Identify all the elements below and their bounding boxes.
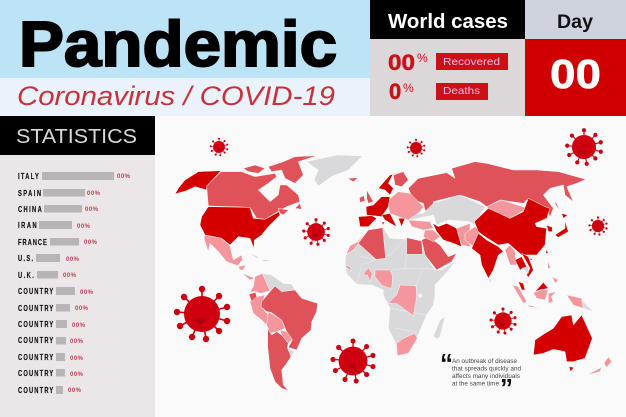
bar chart: 00%	[70, 372, 84, 378]
bar chart: 00%	[72, 323, 86, 329]
heading: day: Day	[557, 12, 593, 33]
recovered tag	[436, 53, 508, 70]
bar chart: COUNTRY	[18, 370, 54, 378]
bar chart: U.K.	[18, 272, 34, 280]
icon: virus atlantic south	[331, 339, 375, 383]
quote text block: An outbreak of disease	[452, 358, 517, 365]
bar chart: IRAN	[18, 222, 37, 230]
icon: virus top left	[210, 138, 228, 156]
recovered percent sign: %	[417, 51, 428, 65]
icon: virus pacific large	[175, 287, 229, 341]
bar chart: 00%	[117, 174, 131, 180]
icon: virus top centre	[407, 139, 425, 157]
heading: statistics: STATISTICS	[16, 126, 137, 148]
icon: virus atlantic north	[303, 219, 329, 245]
deaths percent sign: %	[403, 81, 414, 95]
bar chart: FRANCE	[18, 239, 47, 247]
bar chart: COUNTRY	[18, 321, 54, 329]
heading: world cases: World cases	[388, 11, 508, 33]
bar chart	[18, 172, 131, 395]
title: Pandemic	[19, 8, 337, 80]
bar chart: 00%	[84, 240, 98, 246]
bar chart: COUNTRY	[18, 305, 54, 313]
deaths value: 0	[389, 79, 401, 104]
bar chart: 00%	[68, 388, 82, 394]
russia and central asia	[408, 162, 586, 225]
quote text block: that spreads quickly and	[452, 366, 521, 372]
bar chart: 00%	[70, 356, 84, 362]
quote text block	[440, 348, 521, 403]
bar chart: COUNTRY	[18, 387, 54, 395]
panel: world cases	[370, 0, 525, 116]
panel: statistics	[0, 116, 155, 417]
bar chart: U.S.	[18, 255, 33, 263]
bar chart: ITALY	[18, 173, 39, 181]
world map	[175, 155, 612, 391]
header title band	[0, 0, 370, 116]
bar chart: 00%	[70, 339, 84, 345]
icon: virus indian ocean	[490, 308, 516, 334]
bar chart: 00%	[77, 224, 91, 230]
day number: 00	[550, 51, 601, 97]
europe and western asia	[347, 171, 470, 247]
north america	[175, 155, 362, 270]
bar chart: 00%	[85, 207, 99, 213]
opening quote mark: “	[440, 348, 453, 378]
icon: virus far right	[589, 217, 607, 235]
bar chart: SPAIN	[18, 190, 41, 198]
quote text block: affects many individuals	[452, 373, 520, 380]
bar chart: 00%	[75, 306, 89, 312]
subtitle: Coronavirus / COVID-19	[17, 81, 335, 111]
bar chart: COUNTRY	[18, 354, 54, 362]
deaths tag: Deaths	[443, 85, 480, 97]
quote text block: at the same time	[452, 380, 499, 388]
recovered tag: Recovered	[443, 56, 500, 68]
oceania	[533, 295, 612, 375]
bar chart: 00%	[80, 290, 94, 296]
bar chart: 00%	[66, 257, 80, 263]
bar chart: COUNTRY	[18, 288, 54, 296]
recovered value: 00	[388, 50, 415, 75]
deaths tag	[436, 83, 488, 100]
closing quote mark: ”	[500, 373, 513, 403]
bar chart: COUNTRY	[18, 337, 54, 345]
africa and middle east	[345, 228, 457, 356]
bar chart: CHINA	[18, 206, 42, 214]
panel: day counter	[525, 0, 626, 116]
south america	[242, 273, 318, 391]
bar chart: 00%	[87, 191, 101, 197]
east and south asia	[465, 198, 568, 308]
icon: virus top right	[566, 129, 602, 165]
bar chart: 00%	[63, 273, 77, 279]
